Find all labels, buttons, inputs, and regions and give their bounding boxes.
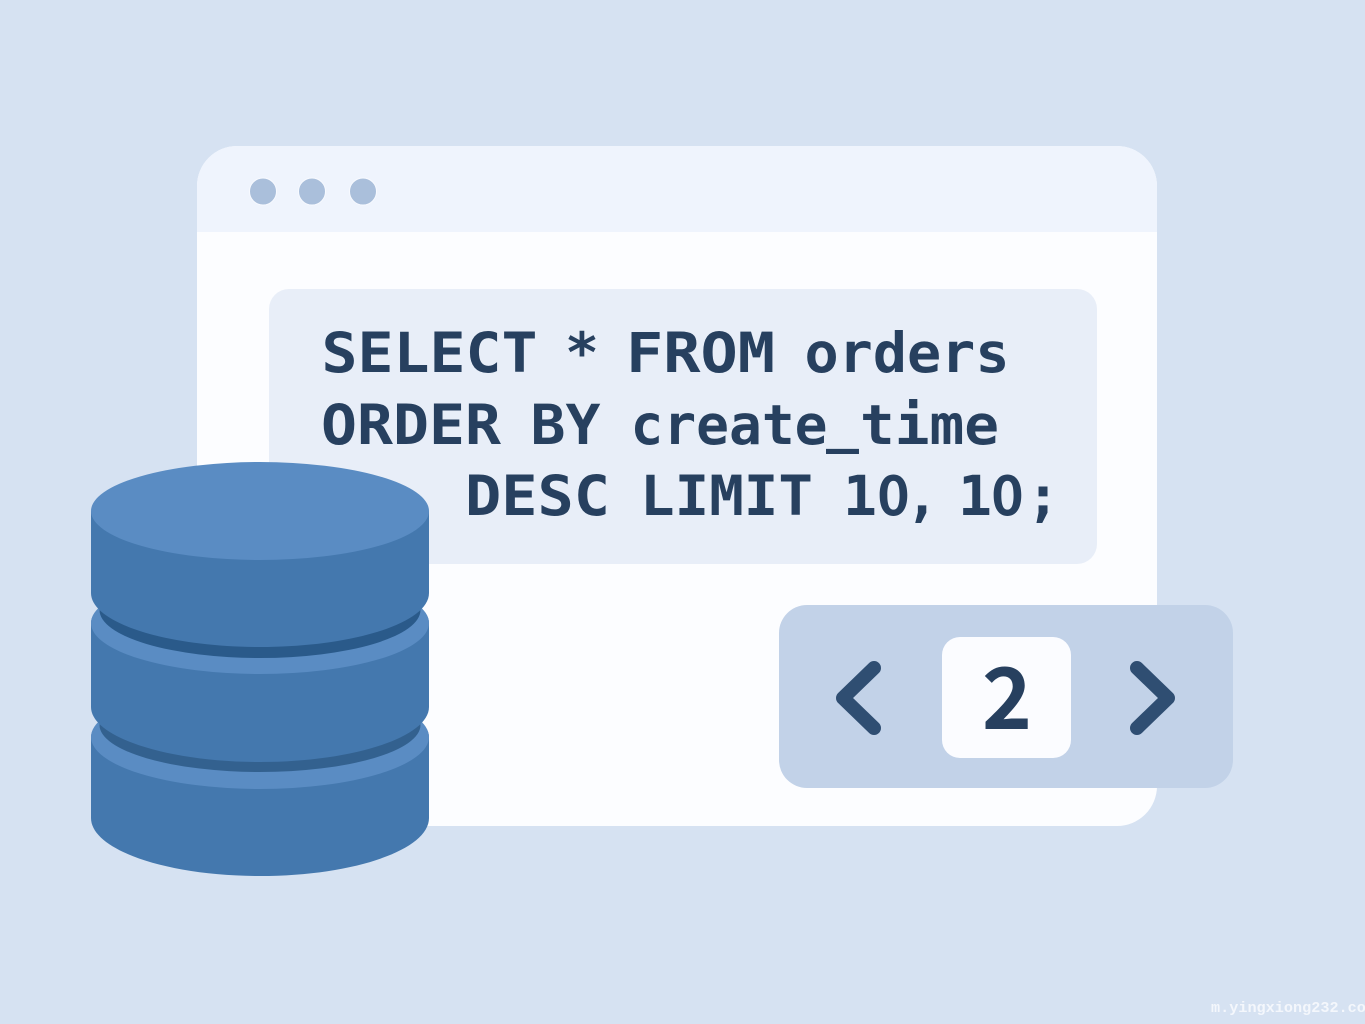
current page box bbox=[942, 631, 1071, 758]
SQL query text: orders bbox=[804, 321, 1010, 385]
top disc bbox=[91, 462, 429, 647]
middle disc bbox=[91, 562, 429, 762]
SQL query text: time bbox=[860, 393, 999, 457]
SQL query text: 1 bbox=[843, 464, 877, 528]
icon: next chevron bbox=[1137, 668, 1168, 728]
SQL query text: 0 bbox=[877, 451, 910, 531]
SQL query text: create bbox=[630, 393, 828, 457]
SQL query text: ORDER bbox=[321, 393, 502, 457]
SQL query text: _ bbox=[826, 390, 860, 454]
icon: database cylinder bbox=[91, 462, 429, 876]
SQL query text: ; bbox=[1026, 464, 1060, 528]
SQL query text: BY bbox=[530, 393, 600, 457]
panel: pagination control bbox=[779, 605, 1233, 788]
window title bar bbox=[197, 146, 1157, 232]
window control dots bbox=[250, 178, 376, 205]
SQL query text: 0 bbox=[991, 451, 1024, 531]
page number: 2 bbox=[982, 631, 1032, 754]
icon: previous chevron bbox=[843, 668, 874, 728]
SQL query text: LIMIT bbox=[640, 464, 813, 528]
SQL query text: * bbox=[565, 321, 599, 385]
SQL query text bbox=[321, 321, 1060, 531]
SQL query text: DESC bbox=[465, 464, 610, 528]
panel: browser window bbox=[197, 146, 1157, 826]
bottom disc bbox=[91, 678, 429, 876]
SQL query text: , bbox=[905, 464, 939, 528]
SQL query text: SELECT bbox=[322, 321, 538, 385]
SQL query text: FROM bbox=[626, 321, 775, 385]
SQL query text: 1 bbox=[958, 464, 992, 528]
panel: SQL code block bbox=[269, 289, 1097, 564]
